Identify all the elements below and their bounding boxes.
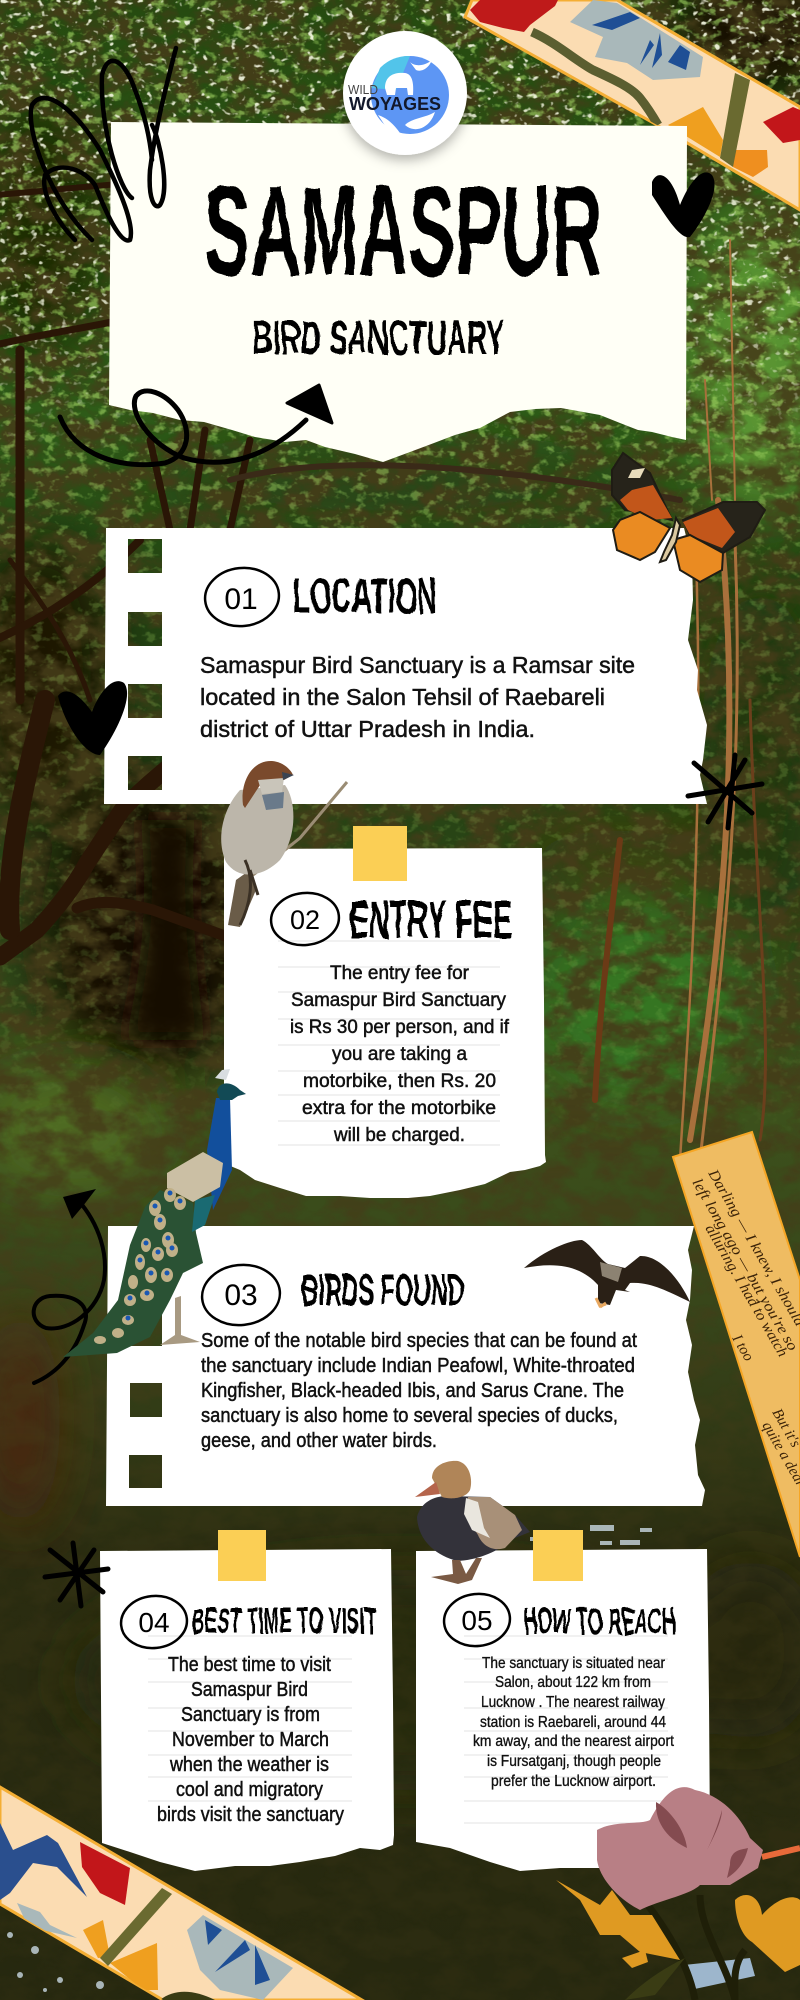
body text: location: Samaspur Bird Sanctuary is a Ramsar site: [200, 652, 635, 678]
body text: location: [200, 652, 635, 742]
body text: birds found: geese, and other water birds.: [201, 1429, 437, 1452]
curly arrow: left: [34, 1189, 105, 1383]
body text: entry fee: motorbike, then Rs. 20: [303, 1070, 496, 1092]
body text: how to reach: [473, 1655, 675, 1790]
body text: best time to visit: Samaspur Bird: [191, 1679, 308, 1701]
body text: best time to visit: Sanctuary is from: [181, 1704, 320, 1726]
body text: birds found: sanctuary is also home to several species of ducks,: [201, 1404, 618, 1427]
floral ribbon: top right: [465, 0, 800, 210]
logo: Wild Woyages: WILD: [348, 82, 378, 97]
icon: black heart, title: [652, 172, 715, 237]
logo: Wild Woyages: WOYAGES: [349, 94, 441, 114]
body text: best time to visit: cool and migratory: [176, 1779, 323, 1801]
number badge 03: [199, 1261, 283, 1329]
flowers: bottom right: [556, 1787, 800, 2000]
body text: entry fee: [290, 962, 510, 1146]
duck: [415, 1461, 530, 1584]
curly arrow: title: [60, 385, 332, 465]
number badge 05: [441, 1591, 513, 1649]
sparrow: [221, 761, 347, 927]
ruled lines: [278, 941, 500, 1145]
body text: best time to visit: when the weather is: [169, 1754, 329, 1776]
panel: 05 how to reach: [416, 1530, 710, 1871]
body text: entry fee: extra for the motorbike: [302, 1097, 496, 1119]
tape: [533, 1530, 583, 1581]
logo: Wild Woyages: [343, 31, 467, 155]
body text: entry fee: is Rs 30 per person, and if: [290, 1016, 510, 1038]
number badge 01: 01: [224, 583, 258, 616]
number badge 04: [118, 1593, 190, 1651]
number badge 05: 05: [461, 1605, 493, 1636]
panel: title: [109, 122, 687, 462]
icon: asterisk, location: [688, 755, 762, 828]
ruled lines: [148, 1636, 352, 1801]
floral ribbon: bottom left: [0, 1787, 362, 2000]
body text: best time to visit: [157, 1654, 344, 1826]
heading: best time to visit: BEST TIME TO VISIT: [191, 1600, 376, 1641]
body text: how to reach: is Fursatganj, though people: [487, 1753, 661, 1770]
body text: birds found: Some of the notable bird species that can be found at: [201, 1329, 637, 1352]
body text: how to reach: The sanctuary is situated near: [482, 1655, 665, 1672]
body text: how to reach: prefer the Lucknow airport.: [491, 1773, 656, 1790]
decorative: tan handwritten ribbon: [673, 1132, 800, 1557]
body text: how to reach: km away, and the nearest airport: [473, 1733, 675, 1750]
body text: best time to visit: November to March: [172, 1729, 329, 1751]
ink scribble flower: [31, 48, 176, 240]
body text: entry fee: The entry fee for: [330, 962, 469, 984]
body text: entry fee: you are taking a: [332, 1043, 467, 1065]
body text: how to reach: Salon, about 122 km from: [495, 1674, 651, 1691]
body text: birds found: Kingfisher, Black-headed Ibis, and Sarus Crane. The: [201, 1379, 624, 1402]
tape: [218, 1530, 266, 1581]
number badge 03: 03: [224, 1279, 258, 1312]
icon: black heart, location: [58, 681, 127, 755]
butterfly: [612, 453, 765, 582]
number badge 01: [202, 564, 282, 630]
decorative: tan handwritten ribbon: left long ago — but you're so: [689, 1176, 800, 1354]
tape: [353, 826, 407, 881]
eagle: [524, 1240, 690, 1307]
body text: entry fee: Samaspur Bird Sanctuary: [291, 989, 506, 1011]
body text: location: district of Uttar Pradesh in India.: [200, 716, 535, 742]
body text: best time to visit: The best time to visit: [168, 1654, 331, 1676]
body text: birds found: the sanctuary include Indian Peafowl, White-throated: [201, 1354, 635, 1377]
number badge 02: [268, 890, 342, 948]
heading: location: LOCATION: [293, 568, 437, 624]
peacock: [63, 1069, 246, 1357]
icon: asterisk, best time: [45, 1543, 108, 1606]
heading: entry fee: ENTRY FEE: [349, 890, 512, 950]
panel: 02 entry fee: [224, 826, 546, 1198]
panel: 01 location: [104, 528, 707, 804]
panel: 04 best time to visit: [100, 1530, 394, 1871]
body text: location: located in the Salon Tehsil of Raebareli: [200, 684, 605, 710]
subheading: Bird Sanctuary: BIRD SANCTUARY: [252, 312, 505, 365]
body text: entry fee: will be charged.: [333, 1124, 465, 1146]
heading: birds found: BIRDS FOUND: [301, 1266, 464, 1315]
number badge 02: 02: [290, 905, 320, 935]
body text: birds found: [201, 1329, 637, 1452]
ruled lines: [464, 1636, 668, 1823]
decorative: tan handwritten ribbon: Darling — I knew, I should: [704, 1166, 800, 1330]
panel: 03 birds found: [106, 1226, 705, 1506]
body text: how to reach: Lucknow . The nearest railway: [481, 1694, 665, 1711]
body text: how to reach: station is Raebareli, around 44: [480, 1714, 666, 1731]
number badge 04: 04: [138, 1607, 170, 1638]
decorative: tan handwritten ribbon: alluring. I had to watch: [702, 1222, 790, 1360]
decorative: tan handwritten ribbon: I too: [728, 1331, 757, 1365]
body text: best time to visit: birds visit the sanctuary: [157, 1804, 344, 1826]
